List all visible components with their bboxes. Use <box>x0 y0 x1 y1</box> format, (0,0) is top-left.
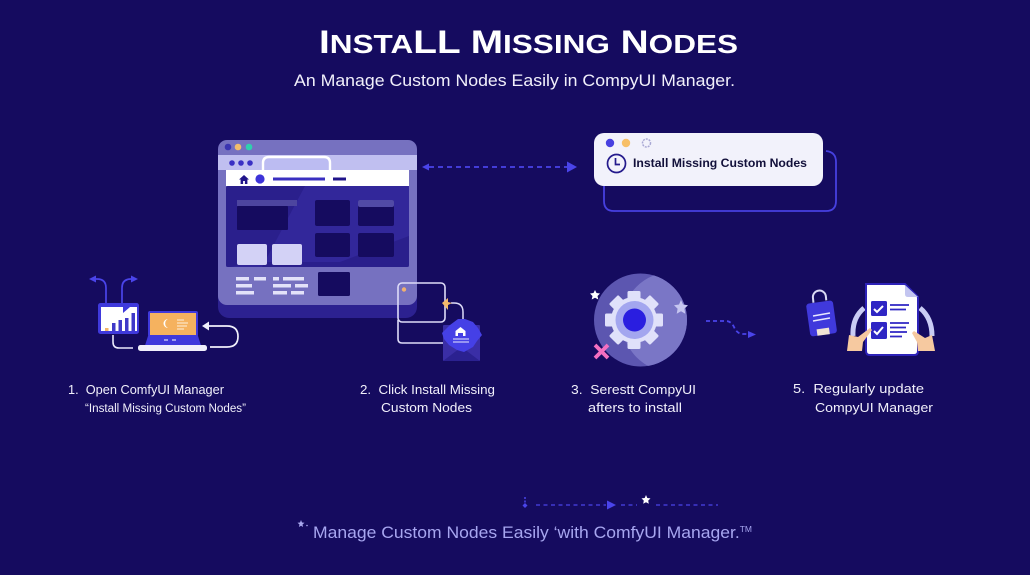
card label: Install Missing Custom Nodes <box>633 156 807 170</box>
title: INSTA LL M ISSING N ODES <box>319 24 738 60</box>
step 3 text: afters to install <box>588 401 682 415</box>
footer note: Manage Custom Nodes Easily ‘with ComfyUI Manager. <box>313 524 715 542</box>
step 1 text: “Install Missing Custom Nodes” <box>85 403 246 415</box>
step 2 text: Custom Nodes <box>381 401 472 415</box>
step 5 text: CompyUI Manager <box>815 401 933 415</box>
callout card: install missing custom nodes <box>594 133 836 211</box>
icon: pink cross <box>595 345 608 358</box>
step 3 text: 3. Serestt CompyUI <box>571 383 696 397</box>
step 5 text: 5. Regularly update <box>793 382 924 396</box>
icon: lilac star <box>674 300 688 314</box>
icon: luggage tag <box>806 290 837 337</box>
arrow: dashed curved arrow <box>706 321 756 338</box>
step 3 text <box>571 383 696 415</box>
subtitle: An Manage Custom Nodes Easily in CompyUI Manager. <box>294 71 735 90</box>
footer decoration: dashed line with arrow and star <box>522 495 718 510</box>
step 2 text: 2. Click Install Missing <box>360 383 495 397</box>
icon: install window and envelope <box>398 283 482 361</box>
icon: clock <box>608 154 626 172</box>
arrow: dashed double arrow from browser to card <box>422 162 577 172</box>
step 5 text <box>793 382 933 415</box>
arrows up from chart <box>92 279 135 303</box>
step 1 text <box>68 383 246 415</box>
icon: settings gear <box>590 274 688 366</box>
icon: white star <box>590 290 600 300</box>
browser window illustration <box>218 140 417 318</box>
step 2 text <box>360 383 495 415</box>
icon: checklist held by hands <box>847 284 935 355</box>
footer note: TM <box>740 525 752 534</box>
icon: chart and laptop <box>89 276 238 351</box>
step 1 text: 1. Open ComfyUI Manager <box>68 383 224 397</box>
